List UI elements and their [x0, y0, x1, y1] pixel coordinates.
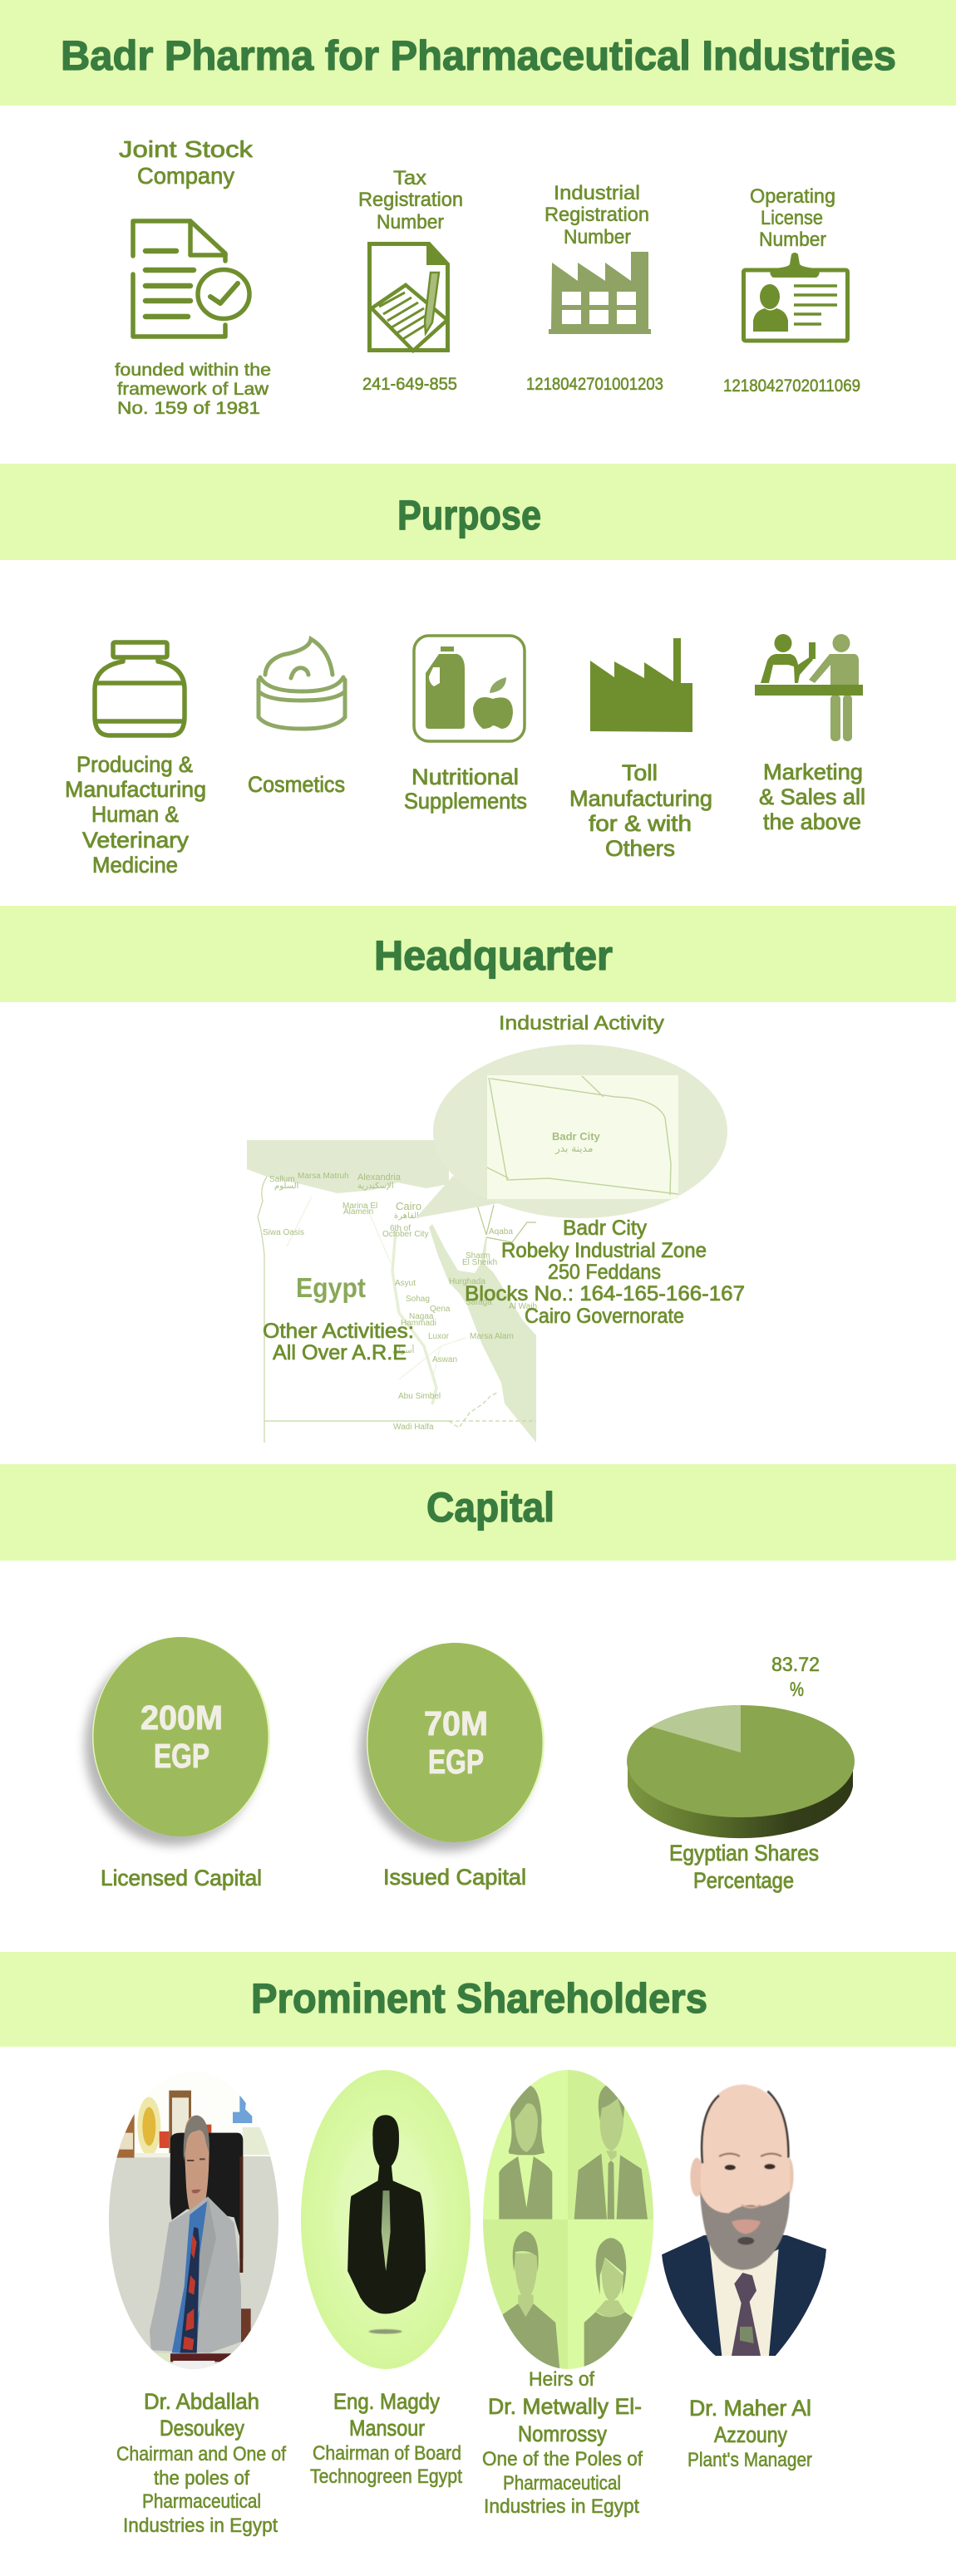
text: badr city address	[465, 1217, 745, 1328]
map of egypt: Abu Simbel	[398, 1392, 441, 1401]
heading band: capital	[0, 1464, 956, 1561]
icon: medicine bottle	[95, 642, 185, 735]
text: 83.72 percent	[771, 1654, 820, 1701]
text: egyptian shares percentage	[669, 1841, 819, 1893]
map of egypt: السلوم	[274, 1182, 298, 1191]
text: 241-649-855: 241-649-855	[362, 375, 457, 394]
text: eng magdy mansour: Eng. Magdy	[333, 2389, 440, 2414]
text: 1218042702011069: 1218042702011069	[723, 376, 860, 396]
text: producing medicine: Veterinary	[82, 828, 190, 853]
text: heirs of dr metwally el-nomrossy: One of the Poles of	[482, 2448, 643, 2470]
text: tax registration number: Registration	[358, 189, 463, 211]
text: joint stock company	[119, 136, 254, 189]
text: eng magdy mansour: Technogreen Egypt	[310, 2465, 462, 2488]
text: licensed capital: Licensed Capital	[101, 1866, 262, 1890]
text: issued capital: Issued Capital	[383, 1865, 526, 1890]
map of egypt: Marsa Alam	[470, 1332, 514, 1341]
map of egypt: Hammadi	[401, 1319, 436, 1328]
map of egypt: Alexandria	[357, 1172, 402, 1182]
issued capital disc: EGP	[428, 1743, 484, 1781]
icon: document with check	[133, 221, 249, 337]
text: dr abdallah desoukey: Desoukey	[160, 2416, 244, 2441]
map of egypt: Hurghada	[449, 1277, 485, 1286]
inset map: badr city	[487, 1075, 678, 1199]
text: nutritional supplements	[404, 764, 527, 814]
pie chart: egyptian shares	[627, 1705, 855, 1838]
portrait: dr abdallah desoukey	[109, 2091, 278, 2369]
map of egypt: Luxor	[428, 1332, 450, 1341]
text: cosmetics: Cosmetics	[248, 772, 345, 797]
text: egyptian shares percentage: Egyptian Shares	[669, 1841, 819, 1866]
text: dr abdallah desoukey: the poles of	[154, 2467, 249, 2490]
panel: shareholders	[104, 2065, 826, 2537]
map of egypt: Cairo	[396, 1200, 421, 1212]
licensed capital disc: 200M	[140, 1698, 223, 1737]
text: egyptian shares percentage: Percentage	[693, 1868, 794, 1893]
text: operating license number: Number	[759, 229, 826, 251]
text: industrial registration number: Industrial	[554, 182, 640, 204]
text: joint stock company: Company	[137, 163, 234, 189]
text: heirs of dr metwally el-nomrossy: Pharmaceutical	[503, 2472, 621, 2495]
text: badr city address: Blocks No.: 164-165-166-167	[465, 1282, 745, 1305]
text: dr abdallah desoukey: Dr. Abdallah	[144, 2389, 259, 2414]
text: toll manufacturing	[569, 760, 712, 861]
callout tail and bubble	[416, 1045, 727, 1218]
text: toll manufacturing: for & with	[589, 811, 692, 836]
licensed capital disc	[85, 1637, 270, 1846]
text: tax registration number	[358, 167, 463, 234]
panel: purpose items	[65, 634, 865, 878]
text: heirs of dr metwally el-nomrossy: Nomrossy	[518, 2421, 607, 2446]
text: operating license number: License	[761, 207, 823, 229]
icon: sales at counter	[755, 634, 863, 741]
text: toll manufacturing: Others	[605, 836, 675, 861]
text: tax registration number: Tax	[393, 167, 426, 189]
map of egypt: القاهرة	[394, 1212, 419, 1221]
text: tax registration number: Number	[377, 211, 444, 234]
licensed capital disc: EGP	[154, 1737, 209, 1775]
icon: tax document with pencil	[369, 243, 450, 351]
map of egypt: Safaga	[466, 1298, 492, 1307]
map of egypt: الإسكندرية	[357, 1182, 394, 1191]
text: eng magdy mansour: Mansour	[349, 2416, 425, 2441]
icon: cream jar	[259, 639, 345, 729]
map of egypt: El Sheikh	[462, 1258, 497, 1267]
map of egypt: Qena	[430, 1305, 451, 1314]
text: producing medicine: Medicine	[92, 853, 178, 878]
text: 83.72 percent: 83.72	[771, 1654, 820, 1676]
text: badr city address: Badr City	[563, 1217, 647, 1240]
map of egypt: Nagaa	[409, 1312, 434, 1321]
text: dr maher al azzouny: Azzouny	[714, 2422, 787, 2447]
text: dr maher al azzouny: Plant's Manager	[687, 2449, 812, 2471]
text: dr maher al azzouny: Dr. Maher Al	[689, 2396, 811, 2421]
map of egypt: Wadi Halfa	[393, 1423, 434, 1432]
text: toll manufacturing: Toll	[622, 760, 658, 785]
issued capital disc	[359, 1643, 545, 1851]
map of egypt: Alamein	[343, 1207, 373, 1217]
text: other activities	[263, 1320, 414, 1364]
heading band: purpose	[0, 464, 956, 560]
text: dr abdallah desoukey	[116, 2389, 286, 2537]
heading: Prominent Shareholders	[251, 1975, 707, 2022]
icon: supplements	[414, 636, 525, 741]
text: nutritional supplements: Supplements	[404, 789, 527, 814]
issued capital disc: 70M	[424, 1704, 488, 1743]
panel: capital	[85, 1637, 855, 1893]
text: other activities: All Over A.R.E	[273, 1341, 407, 1364]
text: founded within framework	[115, 361, 271, 418]
text: dr abdallah desoukey: Industries in Egypt	[123, 2515, 278, 2537]
text: heirs of dr metwally el-nomrossy: Dr. Metwally El-	[488, 2394, 642, 2419]
map of egypt: Aqaba	[489, 1227, 513, 1236]
text: industrial registration number	[545, 182, 649, 248]
text: joint stock company: Joint Stock	[119, 136, 254, 162]
text: other activities: Other Activities:	[263, 1320, 414, 1343]
text: dr maher al azzouny	[687, 2396, 812, 2471]
panel: company registration	[115, 136, 860, 418]
text: marketing and sales: the above	[763, 809, 861, 834]
text: operating license number: Operating	[750, 185, 835, 208]
text: producing medicine: Manufacturing	[65, 777, 206, 802]
portrait: heirs of dr metwally el-nomrossy	[478, 2065, 659, 2374]
text: producing medicine	[65, 752, 206, 878]
map of egypt: 6th of	[390, 1224, 411, 1233]
map of egypt: Aswan	[432, 1355, 457, 1364]
text: founded within framework: framework of Law	[117, 380, 269, 399]
inset map: badr city: Badr City	[552, 1130, 601, 1143]
text: nutritional supplements: Nutritional	[411, 764, 519, 789]
heading band: headquarter	[0, 906, 956, 1002]
text: heirs of dr metwally el-nomrossy: Industries in Egypt	[484, 2495, 639, 2518]
text: badr city address: 250 Feddans	[548, 1261, 661, 1284]
text: industrial registration number: Number	[564, 226, 631, 248]
text: heirs of dr metwally el-nomrossy: Heirs of	[529, 2368, 594, 2391]
portrait: silhouette eng magdy mansour	[301, 2070, 471, 2369]
text: industrial activity: Industrial Activity	[499, 1012, 664, 1035]
icon: factory with windows	[549, 252, 651, 334]
text: eng magdy mansour: Chairman of Board	[313, 2442, 461, 2465]
map of egypt: Sallum	[269, 1175, 295, 1184]
panel: headquarter map	[247, 1012, 745, 1443]
inset map: badr city: مدينة بدر	[554, 1143, 593, 1155]
map of egypt: Sohag	[406, 1295, 430, 1304]
map of egypt	[247, 1045, 727, 1443]
text: toll manufacturing: Manufacturing	[569, 786, 712, 811]
heading band: prominent shareholders	[0, 1952, 956, 2047]
map of egypt: أسوان	[392, 1345, 415, 1355]
icon: id badge	[743, 253, 848, 341]
title band	[0, 0, 956, 106]
text: marketing and sales: & Sales all	[759, 784, 865, 809]
text: eng magdy mansour	[310, 2389, 462, 2488]
text: badr city address: Cairo Governorate	[525, 1305, 684, 1328]
main title: Badr Pharma for Pharmaceutical Industries	[61, 32, 896, 79]
text: industrial registration number: Registration	[545, 204, 649, 226]
map of egypt: October City	[382, 1230, 429, 1239]
text: badr city address: Robeky Industrial Zone	[501, 1239, 707, 1262]
map of egypt: Asyut	[395, 1279, 416, 1288]
text: producing medicine: Human &	[91, 802, 179, 827]
text: producing medicine: Producing &	[76, 752, 193, 777]
text: 83.72 percent: %	[790, 1679, 804, 1701]
heading: Capital	[426, 1484, 554, 1531]
text: heirs of dr metwally el-nomrossy	[482, 2368, 643, 2518]
map of egypt: Marina El	[342, 1202, 377, 1211]
map of egypt: Al Wajh	[509, 1302, 537, 1311]
text: 1218042701001203: 1218042701001203	[526, 375, 663, 394]
text: egypt: Egypt	[296, 1272, 366, 1303]
portrait: dr maher al azzouny	[662, 2084, 826, 2356]
text: marketing and sales	[759, 760, 865, 834]
text: founded within framework: founded within the	[115, 361, 271, 380]
map of egypt: Siwa Oasis	[263, 1228, 304, 1237]
text: dr abdallah desoukey: Chairman and One of	[116, 2443, 286, 2465]
text: founded within framework: No. 159 of 1981	[117, 399, 260, 418]
heading: Purpose	[397, 492, 541, 538]
heading: Headquarter	[374, 932, 613, 979]
map of egypt: Sharm	[466, 1251, 490, 1261]
text: dr abdallah desoukey: Pharmaceutical	[142, 2490, 261, 2513]
text: marketing and sales: Marketing	[763, 760, 863, 784]
text: operating license number	[750, 185, 835, 251]
map of egypt: Marsa Matruh	[298, 1172, 349, 1181]
icon: factory silhouette	[590, 638, 692, 732]
